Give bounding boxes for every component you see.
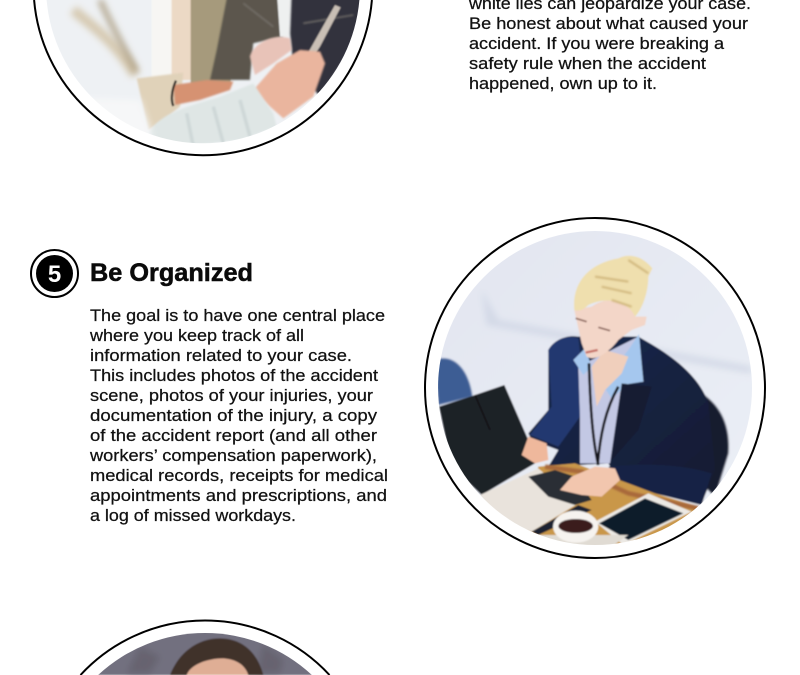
body text: be organized tip: medical records, receipts for medical xyxy=(90,466,388,485)
continued body text: honesty tip: happened, own up to it. xyxy=(469,74,657,93)
body text: be organized tip: This includes photos of the accident xyxy=(90,366,378,385)
photo circle: person handing over a phone xyxy=(34,0,372,157)
photo circle: businesswoman reviewing documents at a desk xyxy=(425,218,765,558)
body text: be organized tip: scene, photos of your injuries, your xyxy=(90,386,373,405)
continued body text: honesty tip: safety rule when the accident xyxy=(469,54,706,73)
body text: be organized tip: a log of missed workdays. xyxy=(90,506,296,525)
body text: be organized tip xyxy=(89,306,388,525)
heading: Be Organized: Be Organized xyxy=(90,259,253,287)
continued body text: honesty tip: Be honest about what caused your xyxy=(469,14,748,33)
body text: be organized tip: where you keep track of all xyxy=(89,326,304,345)
body text: be organized tip: appointments and prescriptions, and xyxy=(90,486,387,505)
icon: number 5 badge: 5 xyxy=(48,261,61,288)
body text: be organized tip: workers’ compensation paperwork), xyxy=(89,446,377,465)
icon: number 5 badge xyxy=(31,250,78,297)
continued body text: honesty tip xyxy=(468,0,751,93)
body text: be organized tip: of the accident report (and all other xyxy=(90,426,377,445)
continued body text: honesty tip: accident. If you were breaking a xyxy=(469,34,725,53)
body text: be organized tip: information related to your case. xyxy=(90,346,352,365)
body text: be organized tip: documentation of the injury, a copy xyxy=(90,406,378,425)
photo circle: smiling man portrait, cropped at the page bottom xyxy=(80,621,330,675)
body text: be organized tip: The goal is to have one central place xyxy=(90,306,385,325)
